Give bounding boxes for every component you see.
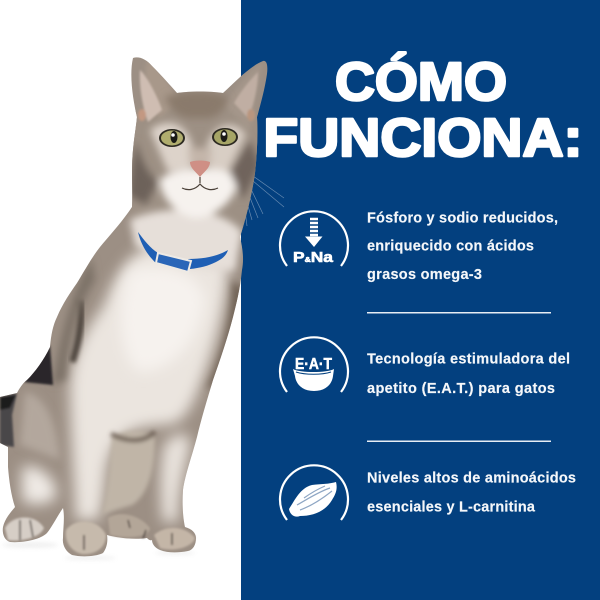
- cat photo illustration: [0, 50, 284, 570]
- feature text: phosphorus: enriquecido con ácidos: [367, 238, 534, 254]
- icon: E.A.T. bowl: [280, 337, 348, 392]
- belly shaded area: [102, 431, 155, 514]
- feature text: phosphorus: Fósforo y sodio reducidos,: [367, 210, 558, 226]
- neck and head fur: [130, 62, 258, 238]
- title: FUNCIONA:: [264, 108, 582, 168]
- nose and mouth: [182, 160, 218, 190]
- chest and leg light fur: [22, 244, 228, 522]
- back and shoulder dark fur: [72, 300, 81, 362]
- icon: muscle: [280, 465, 348, 520]
- body base fur: [0, 50, 275, 570]
- whiskers right: [243, 176, 284, 226]
- icon: phosphorus and sodium reduced: P &Na: [293, 250, 334, 266]
- dark back patch and tail: [0, 345, 53, 447]
- paws details: [5, 514, 195, 554]
- ground shadows: [2, 542, 195, 560]
- haunch upper shading: [20, 392, 60, 460]
- ears inner: [138, 70, 258, 122]
- feature text: E.A.T.: Tecnología estimuladora del: [367, 352, 570, 368]
- feature text: E.A.T.: apetito (E.A.T.) para gatos: [367, 381, 555, 397]
- title: [264, 52, 582, 168]
- panel: white background: [0, 0, 241, 600]
- collar: [138, 232, 228, 272]
- title: CÓMO: [335, 52, 507, 112]
- panel: blue background: [241, 0, 600, 600]
- eyes: [159, 128, 238, 147]
- soft fur highlights: [121, 267, 205, 372]
- feature text: amino acids: esenciales y L-carnitina: [367, 500, 536, 516]
- icon: E.A.T. bowl: E·A·T: [295, 356, 332, 373]
- icon: phosphorus and sodium reduced: [280, 211, 348, 266]
- feature text: amino acids: [367, 470, 576, 516]
- feature text: phosphorus: [367, 210, 558, 283]
- feature text: E.A.T.: [367, 352, 570, 397]
- feature text: amino acids: Niveles altos de aminoácidos: [367, 470, 576, 486]
- feature text: phosphorus: grasos omega-3: [367, 267, 482, 283]
